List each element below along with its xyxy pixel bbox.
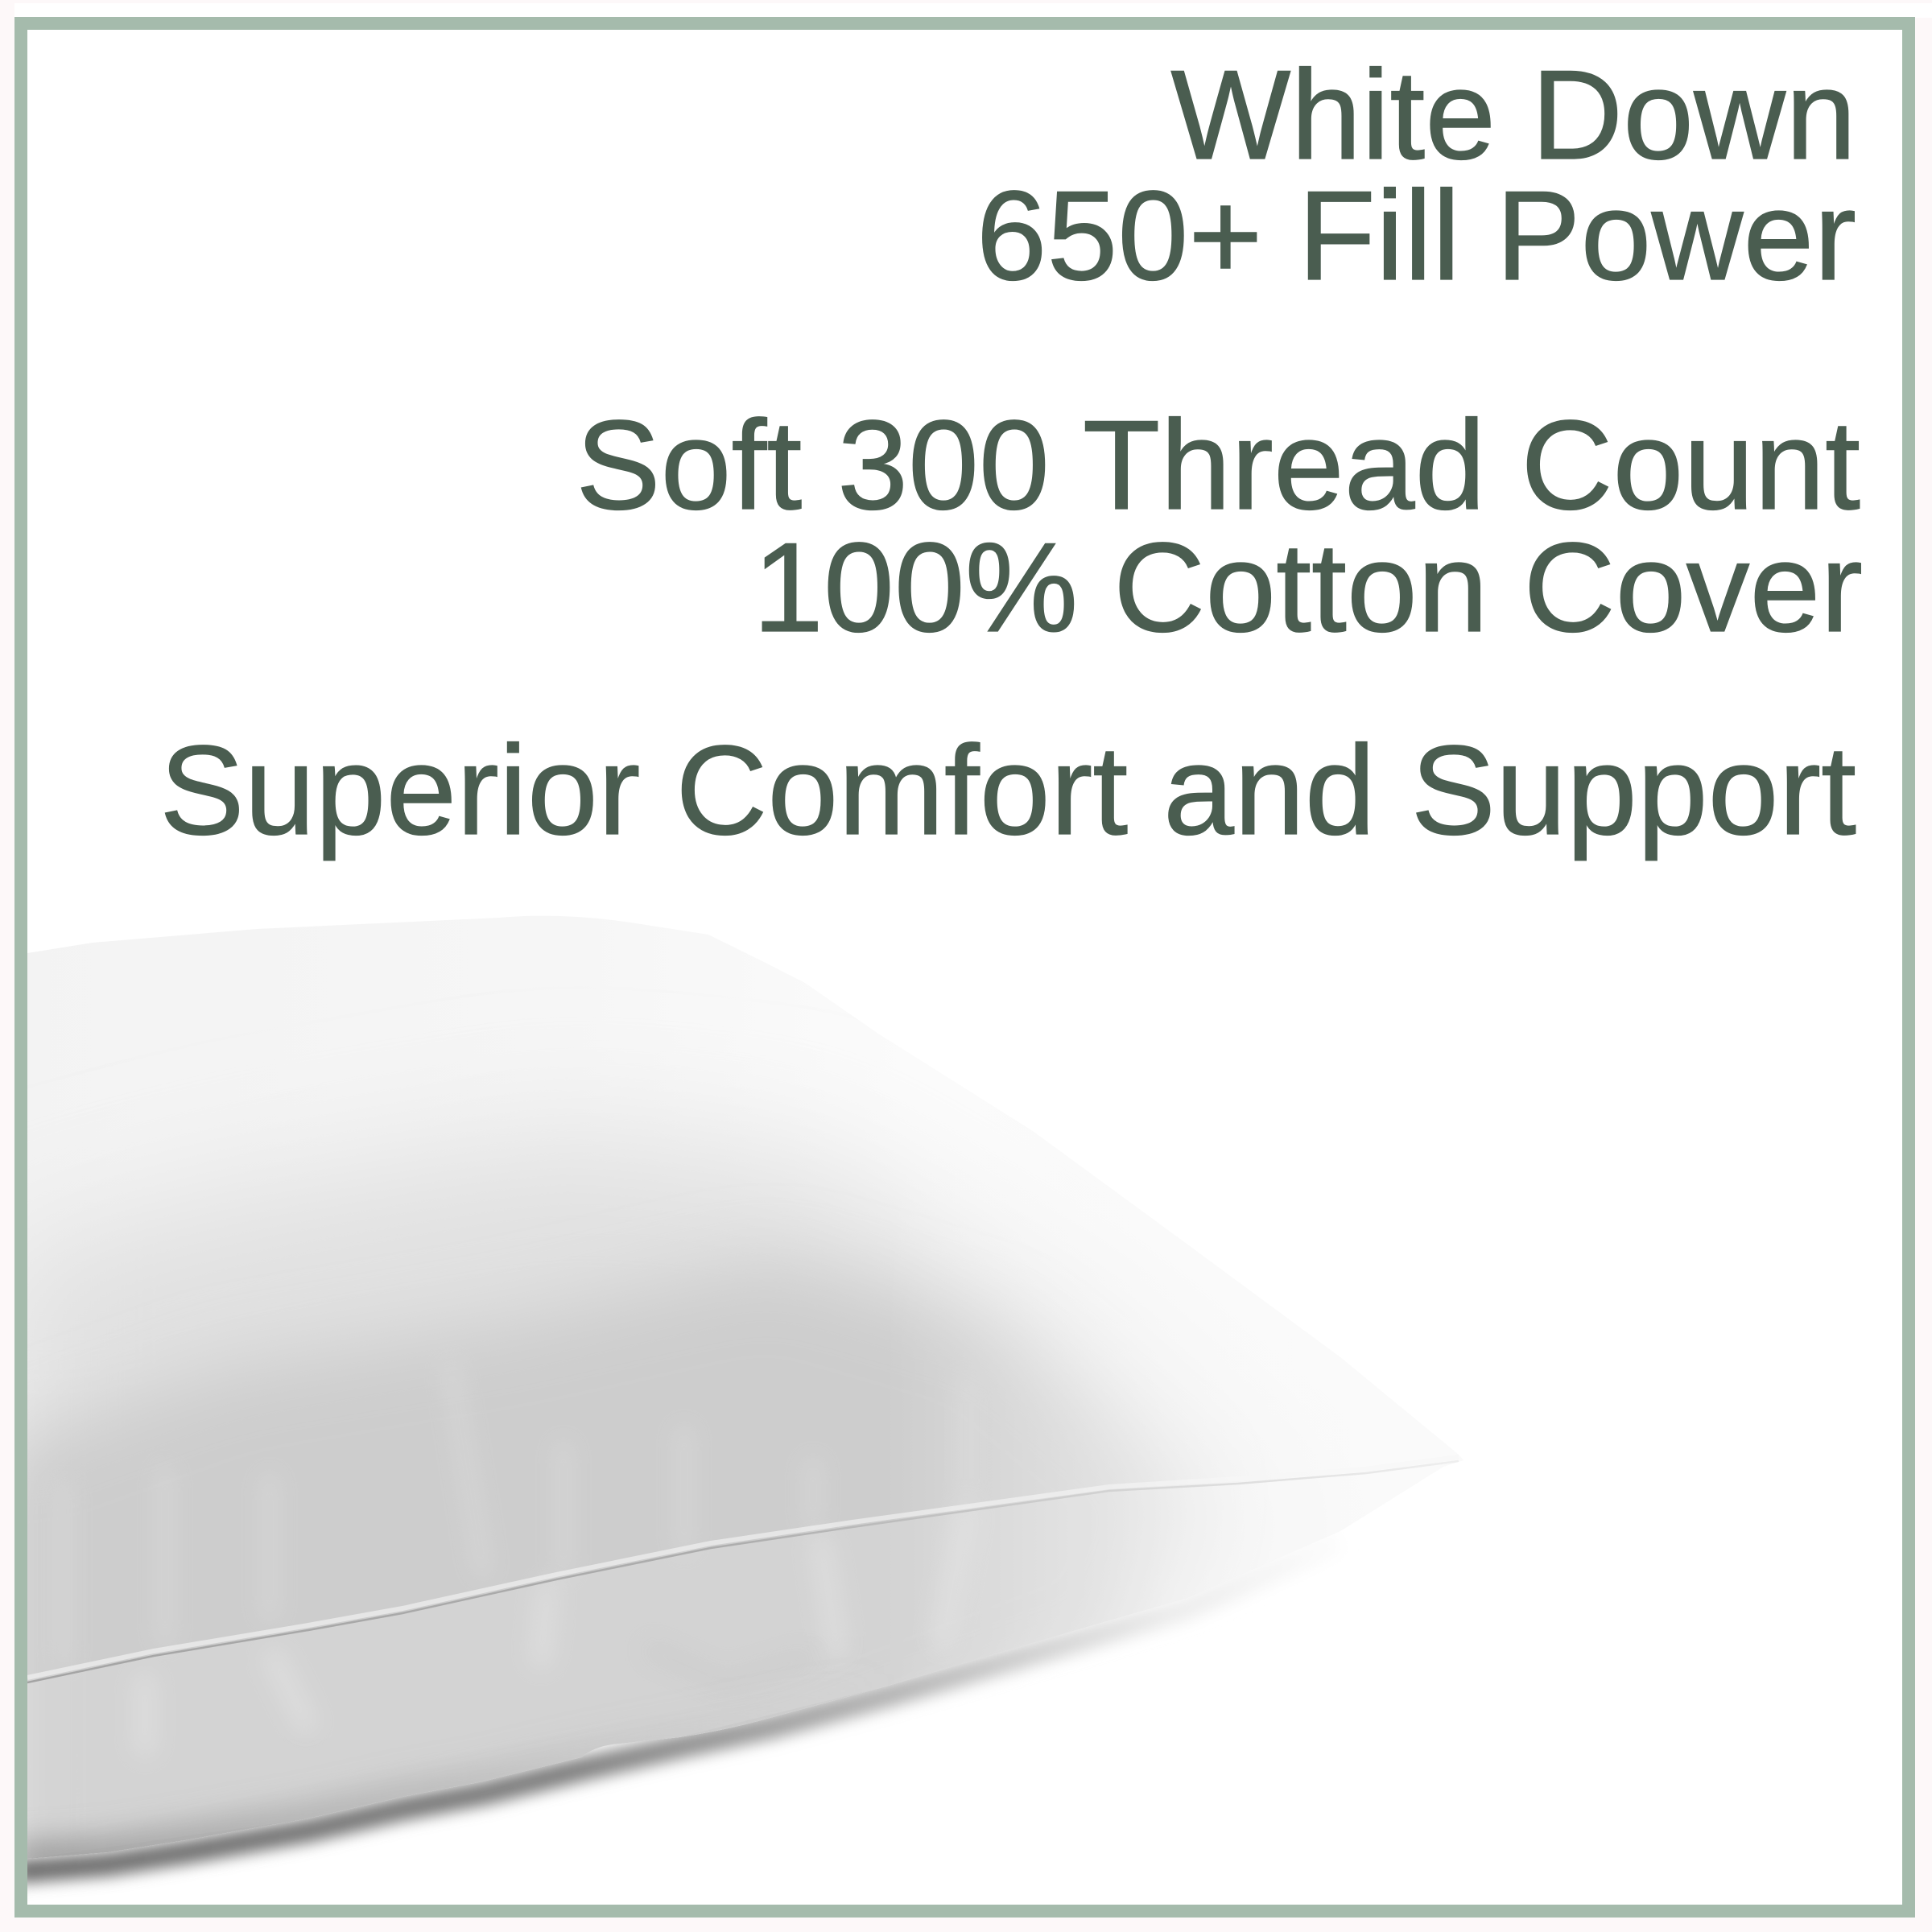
shading: fabric folds: [64, 1368, 966, 1747]
shading: right fade: [976, 1334, 1275, 1654]
piping seam: [27, 1457, 1459, 1682]
shading: central hollow: [27, 1261, 1138, 1859]
text: thread count: Soft 300 Thread Count: [576, 394, 1860, 536]
text block: down fill: [976, 44, 1856, 307]
text: comfort and support: Superior Comfort and Support: [159, 720, 1856, 861]
pillow body: [27, 916, 1459, 1859]
shading: cover band below piping: [27, 1461, 1461, 1859]
text block: cover: [576, 394, 1863, 658]
text: white down: White Down: [1170, 44, 1856, 186]
bottom edge darkening: [27, 1740, 631, 1859]
text: fill power: 650+ Fill Power: [976, 165, 1856, 307]
shading: mid tone: [27, 1117, 1125, 1438]
pillow photo: [27, 916, 1459, 1893]
pillow shadow: [16, 1542, 1340, 1872]
text: cotton cover: 100% Cotton Cover: [753, 517, 1863, 658]
